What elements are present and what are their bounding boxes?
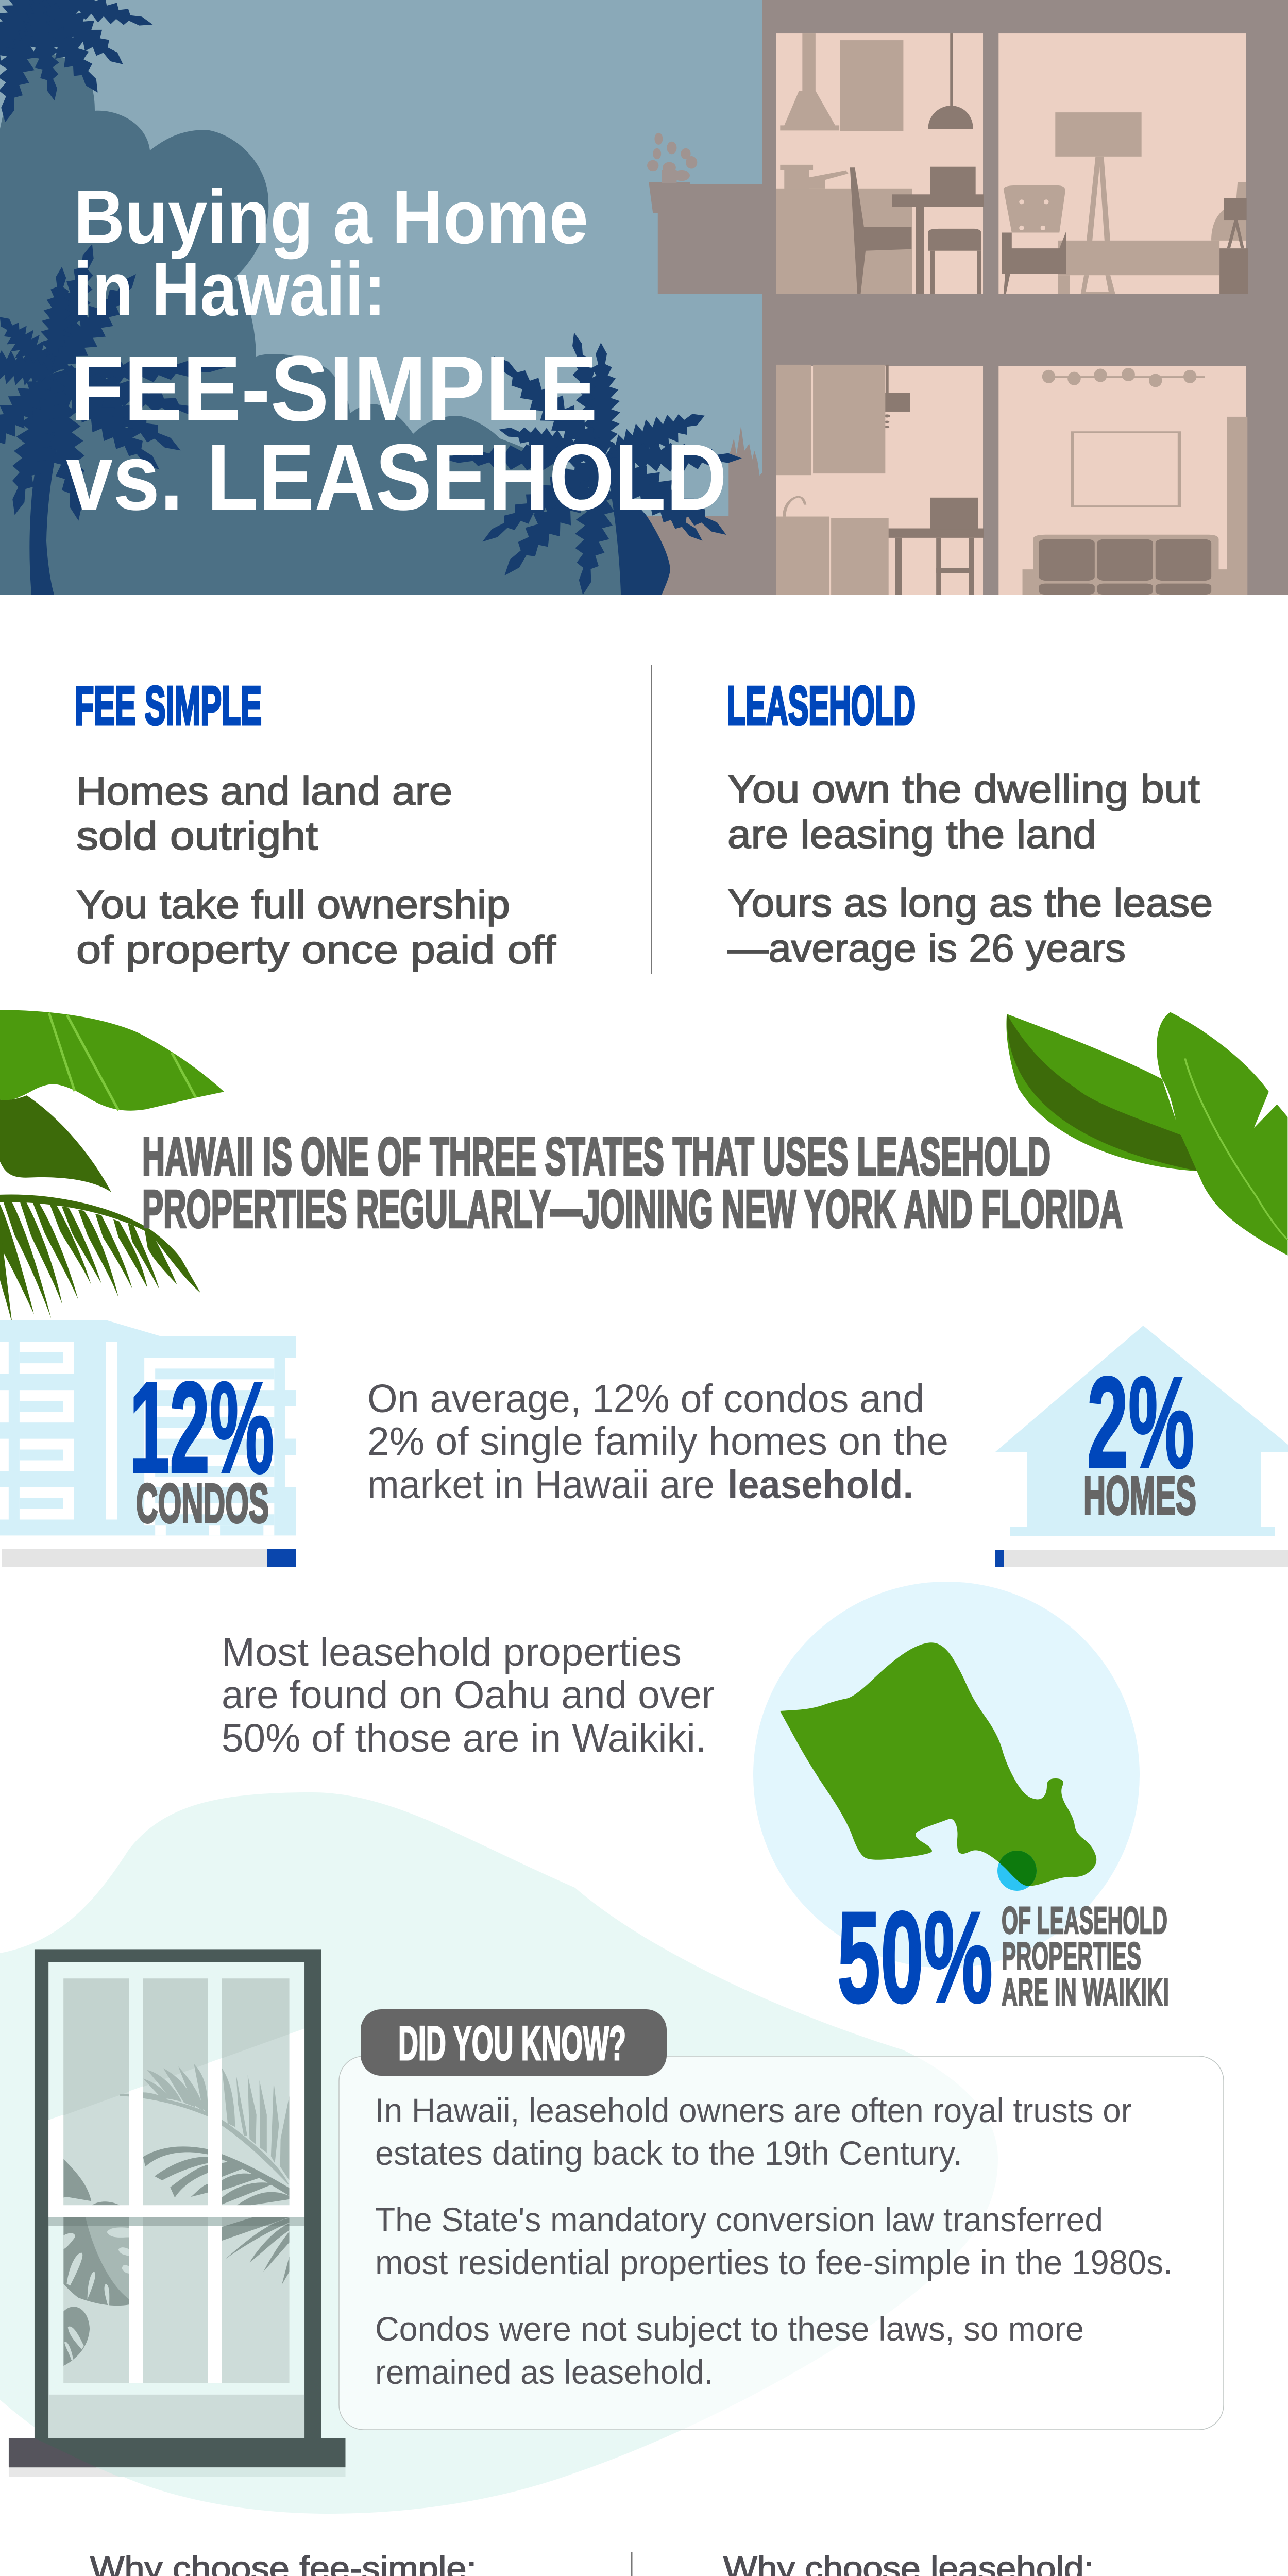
text: did you know facts: remained as leasehold.: [375, 2353, 713, 2391]
apartment rooms: [776, 33, 1246, 595]
balcony and balcony plant: [647, 133, 764, 294]
divider: [651, 665, 652, 974]
text: did you know facts: estates dating back to the 19th Century.: [375, 2134, 962, 2172]
lower room furniture: [776, 365, 1247, 595]
text: leasehold points: Yours as long as the lease: [727, 881, 1213, 925]
text: average percentages: leasehold.: [727, 1463, 913, 1507]
palm frond: [0, 1194, 200, 1326]
label: homes: HOMES: [1083, 1465, 1196, 1526]
heading: leasehold: LEASEHOLD: [727, 675, 916, 736]
panel: homes stat: [995, 1326, 1288, 1567]
illustration: window: [9, 1949, 345, 2477]
icon: house: [995, 1326, 1288, 1536]
text: most leasehold on Oahu: 50% of those are in Waikiki.: [222, 1716, 706, 1760]
text: average percentages: market in Hawaii are: [367, 1463, 715, 1507]
stat: 50 percent in Waikiki: 50%: [837, 1885, 993, 2030]
column: leasehold: [727, 675, 1213, 971]
text: did you know facts: The State's mandatory conversion law transferred: [375, 2200, 1103, 2239]
picture frame: [1073, 432, 1179, 506]
title: in Hawaii:: [74, 247, 386, 332]
text: did you know facts: [375, 2091, 1173, 2391]
kitchen upper furniture: [776, 33, 1246, 294]
text: leasehold points: You own the dwelling but: [727, 767, 1200, 811]
text: most leasehold on Oahu: Most leasehold properties: [222, 1630, 682, 1674]
building: [646, 0, 1288, 595]
text: leasehold points: —average is 26 years: [727, 926, 1126, 971]
divider: [631, 2552, 633, 2576]
title: FEE-SIMPLE: [70, 337, 598, 440]
panel: condos stat: [0, 1320, 296, 1567]
text: average percentages: [367, 1377, 948, 1507]
text: most leasehold on Oahu: [222, 1630, 715, 1760]
balcony grass silhouette: [728, 426, 763, 517]
panel: definitions: [75, 665, 1213, 974]
title: [66, 175, 727, 530]
progress bar: homes: [995, 1550, 1288, 1567]
palm: left: [0, 239, 227, 595]
badge: did you know: [361, 2009, 667, 2076]
palm: top left: [0, 0, 157, 126]
mint background blob: [0, 1792, 998, 2514]
armchair buttons: [1019, 199, 1049, 230]
text: fee simple points: Homes and land are: [76, 769, 452, 814]
text: leasehold points: [727, 767, 1213, 971]
decorative tropical leaves: right: [1006, 1012, 1287, 1256]
label: condos: CONDOS: [136, 1472, 269, 1534]
text: fee simple points: You take full ownership: [76, 883, 510, 927]
stat: 2 percent: 2%: [1087, 1350, 1194, 1495]
text: most leasehold on Oahu: are found on Oahu and over: [222, 1673, 715, 1717]
panel: did you know: [339, 2009, 1224, 2430]
text: did you know facts: Condos were not subject to these laws, so more: [375, 2310, 1084, 2348]
text: fee simple points: sold outright: [76, 814, 318, 858]
hero clouds: [0, 53, 646, 595]
stat: 12 percent: 12%: [129, 1355, 274, 1500]
heading: three states: [142, 1127, 1123, 1239]
text: average percentages: On average, 12% of condos and: [367, 1377, 924, 1421]
text: fee simple points: [76, 769, 556, 972]
text: average percentages: 2% of single family homes on the: [367, 1419, 948, 1464]
text: fee simple points: of property once paid off: [76, 928, 556, 972]
text: did you know facts: most residential properties to fee-simple in the 1980s.: [375, 2243, 1173, 2281]
decorative tropical leaves: left: [0, 1010, 224, 1326]
text: did you know facts: In Hawaii, leasehold owners are often royal trusts or: [375, 2091, 1132, 2129]
callout card: [339, 2056, 1224, 2430]
text: leasehold points: are leasing the land: [727, 812, 1096, 857]
panel: why choose: [90, 2549, 1183, 2576]
title: Buying a Home: [74, 175, 588, 260]
map: Oahu: [753, 1582, 1140, 1968]
badge: did you know: DID YOU KNOW?: [398, 2016, 626, 2070]
stat: 50 percent in Waikiki: PROPERTIES: [1002, 1935, 1141, 1977]
progress bar: condos: [2, 1549, 296, 1567]
panel: hero: [0, 0, 1288, 598]
stat: 50 percent in Waikiki: ARE IN WAIKIKI: [1002, 1971, 1169, 2013]
heading: fee simple: FEE SIMPLE: [75, 675, 262, 736]
kitchen dark furniture: [850, 33, 1248, 595]
icon: condo building: [0, 1320, 296, 1535]
column: fee simple: [75, 675, 556, 972]
title: vs. LEASEHOLD: [66, 424, 727, 530]
palm: right: [442, 329, 742, 598]
sofa cushions: [1039, 539, 1211, 595]
